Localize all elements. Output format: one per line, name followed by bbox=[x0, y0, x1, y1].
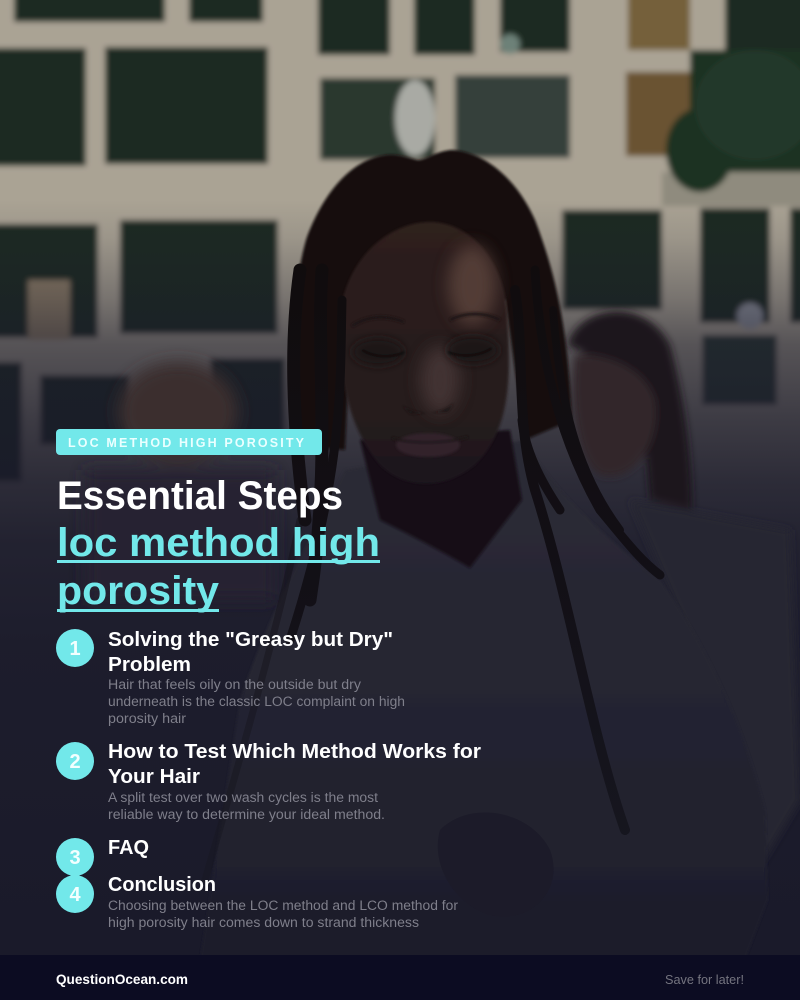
step 3 bbox=[56, 837, 149, 876]
dark gradient overlay bbox=[0, 200, 800, 960]
step 2 bbox=[56, 741, 481, 822]
eye shadows, brows, nose and lips bbox=[352, 314, 500, 457]
badge: LOC METHOD HIGH POROSITY bbox=[68, 436, 305, 450]
badge bbox=[56, 429, 322, 455]
step 1: underneath is the classic LOC complaint on high bbox=[108, 694, 405, 709]
footer bar: Save for later! bbox=[665, 973, 744, 987]
step 1: 1 bbox=[69, 638, 81, 660]
face bbox=[340, 222, 509, 484]
step 4: Conclusion bbox=[108, 874, 216, 896]
step 2: 2 bbox=[69, 751, 81, 773]
step 4: Choosing between the LOC method and LCO method for bbox=[108, 898, 459, 913]
nose highlight bbox=[420, 346, 460, 414]
background figure: blurred woman left bbox=[85, 362, 275, 600]
shirt bbox=[200, 440, 768, 960]
step 1: Hair that feels oily on the outside but dry bbox=[108, 677, 361, 692]
main figure: woman with long braids bbox=[200, 150, 768, 960]
title: loc method high bbox=[57, 521, 380, 565]
step 3: 3 bbox=[69, 847, 81, 869]
hair bbox=[291, 150, 572, 450]
footer bar: QuestionOcean.com bbox=[56, 971, 188, 987]
step 2: reliable way to determine your ideal method. bbox=[108, 807, 385, 822]
forehead highlight bbox=[448, 245, 496, 325]
footer bar bbox=[0, 955, 800, 1000]
title bbox=[57, 474, 380, 613]
neck bbox=[360, 430, 522, 568]
step 4 bbox=[56, 874, 459, 930]
background figure: woman right bbox=[568, 311, 800, 900]
step 2: A split test over two wash cycles is the most bbox=[108, 790, 378, 805]
step 1: Problem bbox=[108, 654, 191, 676]
step 4: 4 bbox=[69, 884, 81, 906]
hand bbox=[438, 813, 554, 917]
braids bbox=[205, 270, 660, 880]
step 2: How to Test Which Method Works for bbox=[108, 741, 481, 763]
title: porosity bbox=[57, 569, 220, 613]
step 1 bbox=[56, 629, 405, 726]
step 3: FAQ bbox=[108, 837, 149, 859]
step 1: porosity hair bbox=[108, 711, 187, 726]
step 4: high porosity hair comes down to strand thickness bbox=[108, 915, 419, 930]
step 2: Your Hair bbox=[108, 766, 200, 788]
step 1: Solving the "Greasy but Dry" bbox=[108, 629, 393, 651]
title: Essential Steps bbox=[57, 474, 343, 518]
